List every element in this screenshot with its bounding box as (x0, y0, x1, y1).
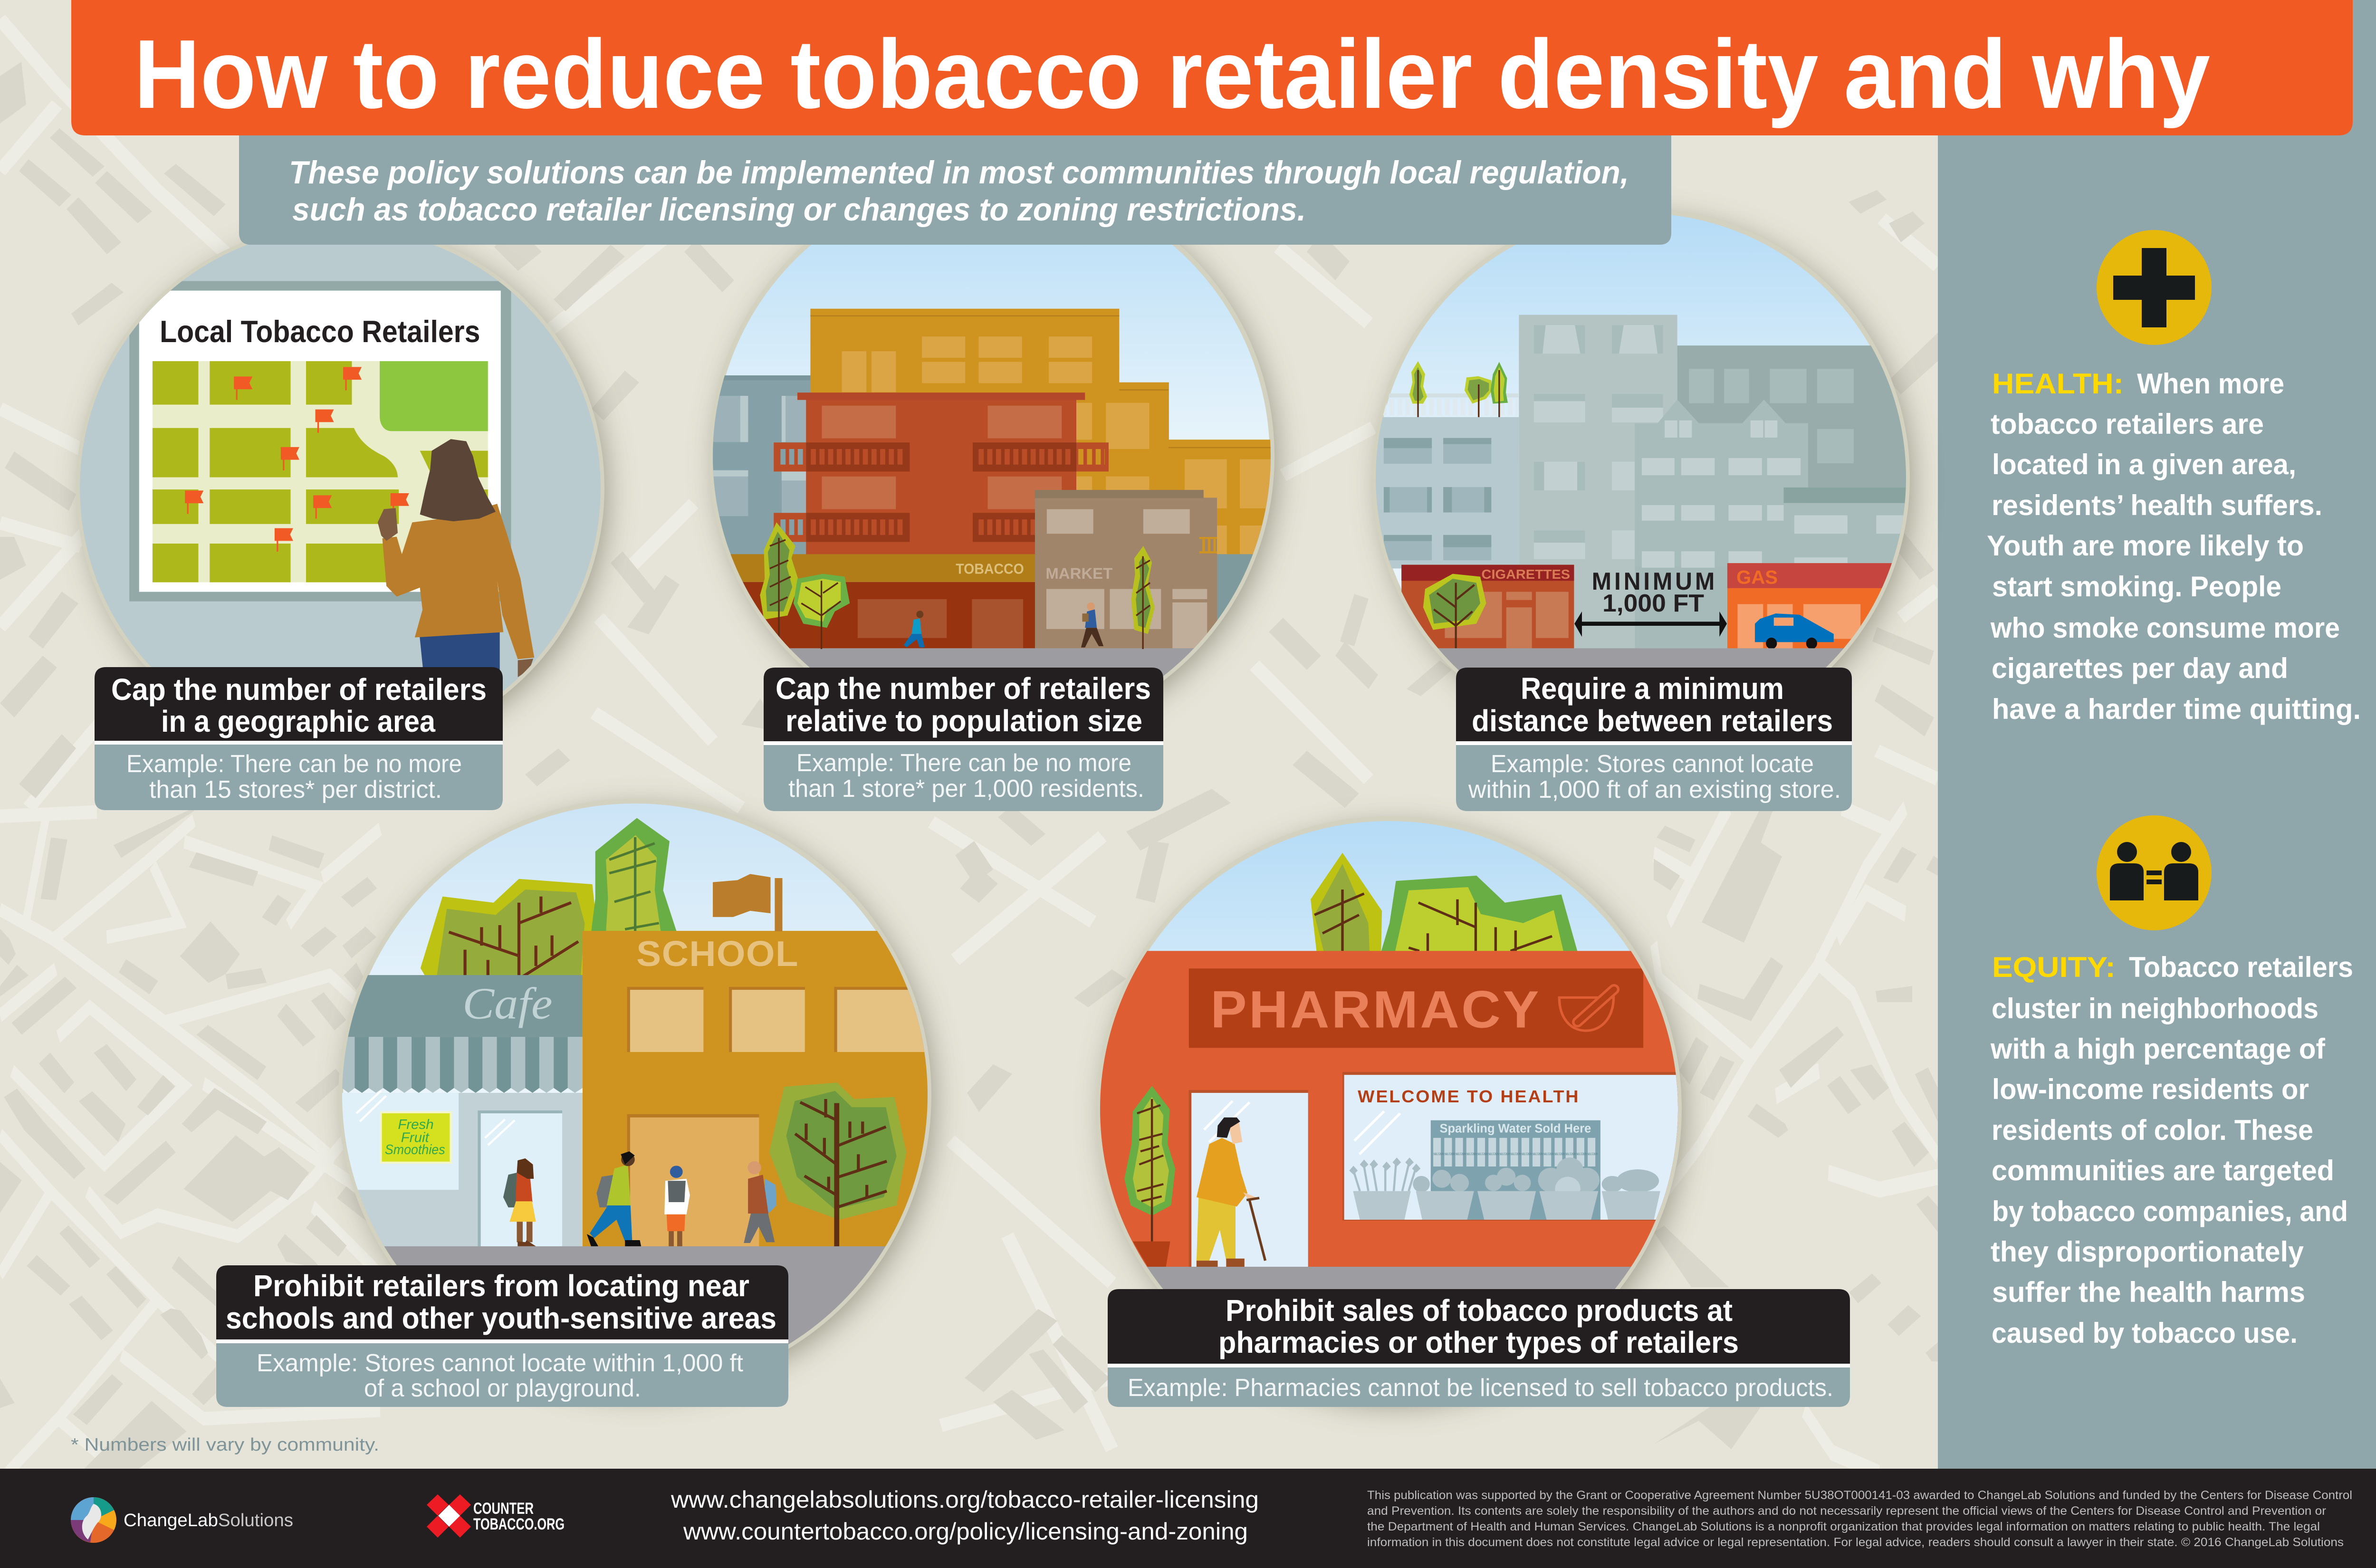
sign: fresh fruit smoothies: Fresh (398, 1117, 434, 1132)
card 3 heading: Require a minimum (1521, 671, 1784, 706)
logo: ChangeLab Solutions (71, 1497, 293, 1543)
legal text: and Prevention. Its contents are solely the responsibility of the authors and do not necessarily represent the official views of the Centers for Disease Control and Prevention or (1367, 1504, 2326, 1518)
label: minimum 1,000 ft: 1,000 FT (1602, 589, 1704, 617)
card 4 example: Example: Stores cannot locate within 1,000 ft (257, 1349, 744, 1377)
intro text (289, 154, 1629, 228)
scene: pharmacy storefront (1091, 853, 1696, 1320)
storefront: cigarettes (1401, 565, 1574, 649)
card 2 heading: relative to population size (786, 704, 1142, 738)
text: health: located in a given area, (1992, 449, 2296, 480)
card 1 heading (111, 672, 487, 738)
card 4 heading: schools and other youth-sensitive areas (226, 1301, 776, 1335)
text: equity: communities are targeted (1992, 1155, 2334, 1186)
intro text: These policy solutions can be implemented in most communities through local regulation, (289, 154, 1629, 191)
sign: welcome to health: WELCOME TO HEALTH (1358, 1087, 1578, 1106)
text: health: HEALTH: (1992, 368, 2124, 400)
legal text: the Department of Health and Human Services. ChangeLab Solutions is a nonprofit organization that provides legal information on matters relating to public health. The legal (1367, 1520, 2320, 1533)
panel: circle 5 pharmacy (1091, 819, 1696, 1405)
footer links: www.changelabsolutions.org/tobacco-retailer-licensing (671, 1486, 1259, 1513)
label: minimum 1,000 ft: MINIMUM (1592, 567, 1715, 595)
card 1 heading: in a geographic area (161, 704, 435, 738)
text: health: Youth are more likely to (1987, 530, 2304, 562)
card 5 heading (1218, 1293, 1739, 1359)
icon: school flag (713, 874, 782, 931)
card 1 heading: Cap the number of retailers (111, 672, 487, 707)
card 4 example (257, 1349, 744, 1402)
storefront: gas: GAS (1736, 567, 1778, 588)
text: equity (1990, 951, 2353, 1349)
scene: school next to a cafe (335, 818, 941, 1369)
text: equity: caused by tobacco use. (1992, 1317, 2298, 1349)
legal text: This publication was supported by the Grant or Cooperative Agreement Number 5U38OT000141-03 awarded to ChangeLab Solutions and funded by the Centers for Disease Control (1367, 1489, 2352, 1502)
text: health: tobacco retailers are (1991, 408, 2264, 440)
sign: school: SCHOOL (636, 934, 798, 974)
scene: person reading a retailer map (80, 244, 601, 691)
text: equity: with a high percentage of (1990, 1033, 2326, 1065)
text: equity: they disproportionately (1991, 1236, 2304, 1268)
icon: blue car (1755, 613, 1834, 649)
text: health: have a harder time quitting. (1992, 693, 2361, 725)
text: health: cigarettes per day and (1992, 652, 2288, 684)
storefront: gas (1727, 563, 1898, 649)
text: equity: Tobacco retailers (2129, 951, 2353, 983)
footer links: www.countertobacco.org/policy/licensing-and-zoning (683, 1518, 1248, 1545)
scene: tobacco shop and market street (713, 309, 1280, 706)
person: boy walking (587, 1151, 641, 1246)
panel: circle 2 street scene (699, 245, 1295, 710)
logo: Counter Tobacco: COUNTER (473, 1500, 534, 1518)
footer band (0, 1469, 2376, 1568)
legal text: information in this document does not constitute legal advice or legal representation. For legal advice, readers should consult a lawyer in their state. © 2016 ChangeLab Solutions (1367, 1536, 2344, 1549)
shelf: sparkling water display: Sparkling Water Sold Here (1440, 1121, 1591, 1135)
arrow: distance between stores (1574, 612, 1727, 637)
card 5 heading: Prohibit sales of tobacco products at (1226, 1293, 1733, 1328)
text: health: When more (2137, 368, 2284, 400)
person: shopper with groceries (1081, 602, 1103, 648)
card 3 example: Example: Stores cannot locate (1491, 750, 1814, 778)
panel: circle 1 retailer map (72, 226, 608, 755)
text: equity: low-income residents or (1992, 1073, 2309, 1105)
logo: ChangeLab Solutions: ChangeLabSolutions (124, 1511, 293, 1530)
produce and flower baskets (1349, 1157, 1660, 1220)
title bar (71, 0, 2353, 135)
text: equity: residents of color. These (1992, 1114, 2313, 1146)
card 4 heading (226, 1269, 776, 1335)
person: pedestrian in blue (904, 611, 925, 648)
label card 5 (1108, 1289, 1850, 1407)
person: student in brown (744, 1161, 776, 1243)
card 2 heading (776, 671, 1151, 738)
card 1 example: Example: There can be no more (126, 750, 462, 778)
logo: Counter Tobacco (427, 1494, 565, 1538)
legal text (1367, 1489, 2352, 1549)
card 3 example: within 1,000 ft of an existing store. (1468, 776, 1841, 803)
logo: Counter Tobacco: TOBACCO.ORG (473, 1515, 565, 1533)
text: equity: suffer the health harms (1992, 1276, 2305, 1308)
text: health: residents’ health suffers. (1992, 489, 2322, 521)
scene: two retailers separated by a minimum distance (1370, 315, 1922, 706)
shelf: sparkling water display: SELTZER SELTZER SELTZER SELTZER SELTZER SELTZER SELTZER SELTZER SELTZER SELTZER SELTZER SELTZER SELTZER SELTZER SELTZER (1433, 1153, 1598, 1156)
footer links (671, 1486, 1259, 1545)
sidebar panel (1938, 0, 2376, 1469)
label card 4 (216, 1265, 788, 1407)
sign: fresh fruit smoothies: Fruit (401, 1130, 430, 1145)
text: health: start smoking. People (1992, 571, 2281, 602)
sign: fresh fruit smoothies (380, 1111, 452, 1164)
text: equity: by tobacco companies, and (1992, 1195, 2348, 1227)
label: minimum 1,000 ft (1592, 567, 1715, 617)
sign: pharmacy: PHARMACY (1210, 980, 1539, 1039)
storefront: cigarettes: CIGARETTES (1482, 567, 1570, 582)
person: child with blue cap (664, 1166, 690, 1246)
panel: circle 4 school and cafe (335, 801, 941, 1395)
card 2 heading: Cap the number of retailers (776, 671, 1151, 706)
person: elderly woman with cane (1197, 1118, 1265, 1267)
card 3 example (1468, 750, 1841, 803)
label card 1 (95, 667, 503, 810)
intro text: such as tobacco retailer licensing or changes to zoning restrictions. (292, 191, 1306, 228)
card 4 heading: Prohibit retailers from locating near (253, 1269, 749, 1303)
card 1 example (126, 750, 462, 803)
text: health: who smoke consume more (1990, 612, 2340, 644)
card 4 example: of a school or playground. (364, 1375, 641, 1402)
panel: circle 3 minimum distance scene (1370, 211, 1922, 749)
card 3 heading: distance between retailers (1472, 704, 1833, 738)
sign: market: MARKET (1045, 564, 1113, 582)
scene: person reading a retailer map: Local Tobacco Retailers (160, 314, 480, 349)
icon: potted tree (1124, 1086, 1175, 1267)
footnote: * Numbers will vary by community. (71, 1435, 379, 1455)
text: health (1987, 368, 2361, 725)
card 5 heading: pharmacies or other types of retailers (1218, 1325, 1739, 1359)
card 1 example: than 15 stores* per district. (149, 776, 442, 803)
card 3 heading (1472, 671, 1833, 738)
sign: cafe: Cafe (462, 978, 553, 1028)
intro panel (239, 135, 1671, 245)
card 2 example: than 1 store* per 1,000 residents. (788, 775, 1144, 803)
text: equity: EQUITY: (1992, 951, 2116, 983)
card 2 example: Example: There can be no more (796, 749, 1131, 777)
icon: health plus (2097, 230, 2212, 345)
sign: tobacco: TOBACCO (956, 561, 1024, 577)
person: girl with backpack (503, 1158, 536, 1246)
card 5 example: Example: Pharmacies cannot be licensed to sell tobacco products. (1128, 1374, 1833, 1402)
label card 3 (1456, 668, 1852, 811)
title: How to reduce tobacco retailer density and why (134, 19, 2210, 129)
icon: mortar and pestle (1559, 989, 1614, 1031)
card 2 example (788, 749, 1144, 803)
shelf: sparkling water display (1431, 1120, 1600, 1220)
label card 2 (764, 668, 1163, 811)
text: equity: cluster in neighborhoods (1992, 993, 2319, 1024)
sign: fresh fruit smoothies: Smoothies (385, 1143, 445, 1157)
icon: equity people (2097, 815, 2212, 930)
